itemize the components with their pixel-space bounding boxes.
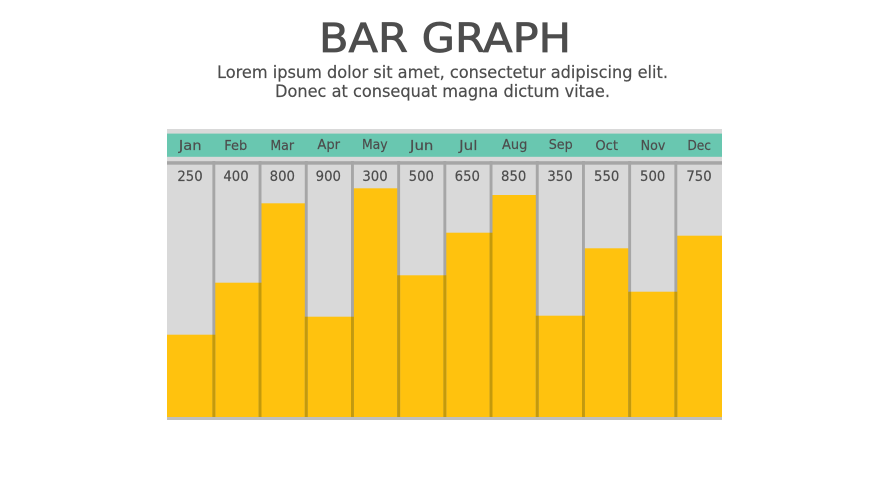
column: Jan: Jan	[178, 139, 202, 154]
subtitle text: Donec at consequat magna dictum vitae.	[275, 82, 610, 101]
column: Feb	[214, 139, 259, 417]
column: Jun	[398, 139, 444, 417]
column: Jan: 250	[177, 169, 203, 185]
column: Mar: Mar	[270, 139, 295, 154]
column: May: 300	[362, 169, 388, 185]
column: Oct: 550	[594, 169, 619, 185]
column: Jul: Jul	[458, 139, 477, 154]
column: Nov: 500	[640, 169, 665, 185]
column: Nov: Nov	[641, 139, 666, 154]
column: Dec	[676, 139, 722, 417]
column: Jul: 650	[455, 169, 480, 185]
column: Oct: Oct	[595, 139, 618, 154]
column: Jul	[445, 139, 490, 417]
bar chart	[167, 129, 722, 420]
column: May: May	[362, 138, 388, 153]
column: Apr	[306, 138, 352, 417]
column: Apr: 900	[316, 169, 341, 185]
column: Apr: Apr	[317, 138, 341, 153]
subtitle text	[217, 63, 668, 101]
month header band	[167, 134, 722, 157]
column: Sep: Sep	[549, 138, 573, 153]
column: Aug	[491, 138, 536, 417]
column: Dec: 750	[686, 169, 712, 185]
column: Nov	[630, 139, 675, 417]
baseline	[167, 417, 722, 420]
column: Jun: Jun	[409, 139, 433, 154]
column: Feb: 400	[223, 169, 249, 185]
bar dividers	[212, 233, 677, 417]
column: Oct	[583, 139, 629, 417]
subtitle text: Lorem ipsum dolor sit amet, consectetur adipiscing elit.	[217, 63, 668, 82]
header rule	[167, 161, 722, 165]
column: Dec: Dec	[687, 139, 711, 154]
column: Sep: 350	[547, 169, 573, 185]
title: BAR GRAPH	[319, 16, 571, 62]
column: Mar	[260, 139, 306, 417]
column: Feb: Feb	[224, 139, 247, 154]
column: Mar: 800	[270, 169, 295, 185]
column: Jun: 500	[409, 169, 434, 185]
column: Sep	[537, 138, 583, 417]
column: Jan	[167, 139, 213, 417]
column: Aug: 850	[501, 169, 526, 185]
column: May	[352, 138, 398, 417]
column dividers	[212, 161, 677, 417]
chart track background	[167, 165, 722, 417]
column: Aug: Aug	[502, 138, 527, 153]
